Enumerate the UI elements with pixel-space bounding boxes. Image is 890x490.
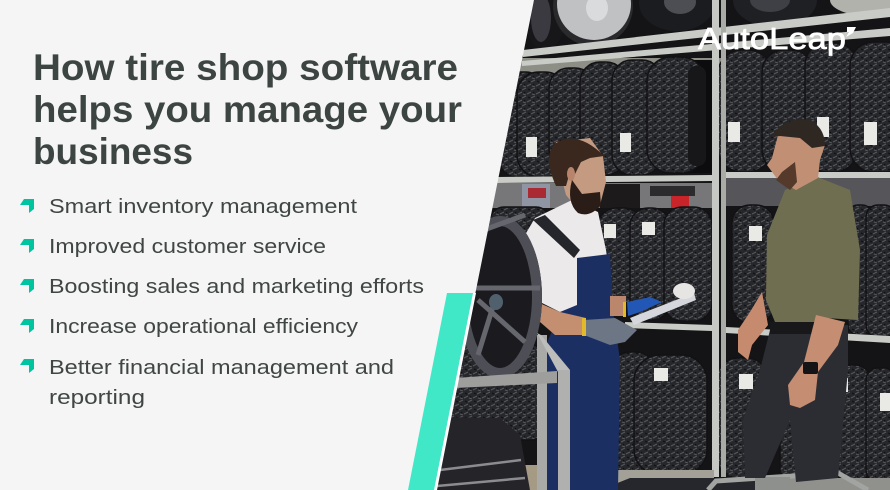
front wheel — [458, 215, 542, 378]
blue glove — [627, 297, 662, 316]
customer head — [767, 132, 825, 190]
lower shelves — [625, 322, 890, 343]
item: financial management — [49, 356, 394, 409]
customer beard — [776, 162, 797, 190]
floor — [525, 465, 890, 490]
title: business — [33, 131, 193, 172]
fourth row tires — [450, 345, 890, 482]
logo: AutoLeap: AutoLeap — [698, 21, 846, 56]
mechanic head — [552, 138, 606, 212]
customer left arm — [738, 292, 768, 360]
item: customer service: Improved customer service — [49, 235, 326, 258]
item: efficiency: Increase operational efficiency — [49, 315, 359, 338]
teal accent stripe — [408, 293, 473, 490]
top row rims — [525, 0, 890, 50]
white divider edge — [434, 293, 476, 490]
overalls — [546, 254, 620, 490]
icon: bullet 2 — [20, 239, 34, 253]
item: inventory: Smart inventory management — [49, 195, 357, 218]
left panel background — [0, 0, 534, 490]
clipboard and paper roll — [630, 293, 696, 325]
customer right arm and hand — [788, 315, 845, 408]
icon: bullet 3 — [20, 279, 34, 293]
mechanic — [522, 138, 696, 490]
watch — [803, 362, 818, 374]
black tire base — [430, 417, 530, 490]
customer — [738, 119, 860, 482]
gray glove — [584, 318, 637, 345]
top shelves — [497, 8, 890, 183]
title — [33, 47, 462, 172]
wall behind top shelf — [490, 58, 890, 208]
customer shirt — [766, 176, 860, 323]
metal rack — [455, 333, 570, 490]
customer jeans — [743, 325, 848, 482]
third row tires — [490, 205, 890, 337]
benefits list — [20, 195, 424, 409]
second row tires — [500, 42, 890, 177]
mechanic beard — [570, 180, 601, 214]
photo: tire shop with two men — [430, 0, 890, 490]
mechanic hair — [549, 139, 604, 186]
mechanic ear — [567, 167, 575, 181]
icon: bullet 1 — [20, 199, 34, 213]
customer belt — [770, 322, 816, 334]
mechanic white shirt — [522, 200, 613, 312]
item: financial management: reporting — [49, 386, 145, 409]
overalls strap — [533, 215, 580, 258]
title: How tire shop software — [33, 47, 458, 88]
icon: bullet 4 — [20, 319, 34, 333]
customer hair — [771, 119, 825, 148]
forearm — [537, 302, 586, 335]
cart handle — [708, 473, 868, 490]
title: helps you manage your — [33, 89, 462, 130]
icon: bullet 5 — [20, 359, 34, 373]
shelf posts — [712, 0, 726, 477]
item: financial management: Better financial management and — [49, 356, 394, 379]
item: sales and marketing: Boosting sales and marketing efforts — [49, 275, 424, 298]
